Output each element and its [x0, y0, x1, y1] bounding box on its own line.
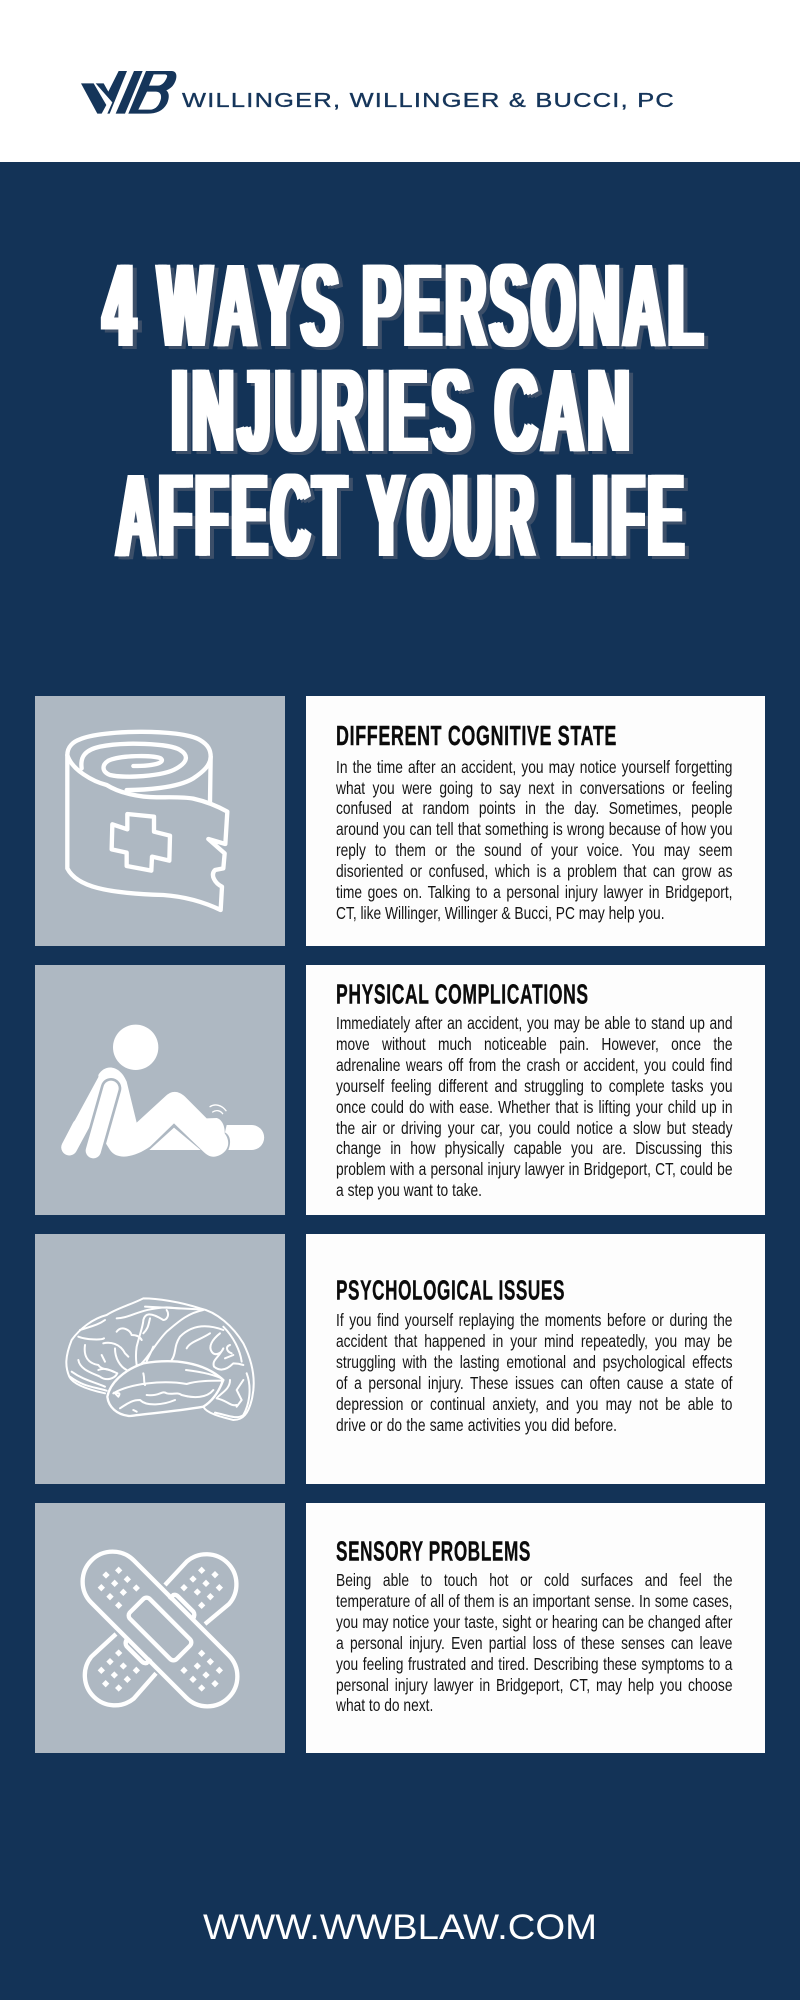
panel: cognitive state text: [306, 696, 765, 946]
logo wordmark: WILLINGER, WILLINGER & BUCCI, PC: [182, 89, 675, 112]
heading: SENSORY PROBLEMS: [336, 1535, 531, 1566]
body text: depression or continual anxiety, and you may not be able to: [336, 1394, 732, 1414]
body text: If you find yourself replaying the moments before or during the: [336, 1310, 732, 1330]
title: [100, 240, 708, 582]
footer website: WWW.WWBLAW.COM: [203, 1908, 597, 1947]
body text: you feeling frustrated and tired. Describing these symptoms to a: [336, 1654, 732, 1674]
body text: personal injury lawyer in Bridgeport, CT, may help you choose: [336, 1675, 732, 1695]
title: INJURIES CAN: [172, 344, 635, 476]
logo: [81, 71, 675, 114]
body text: disoriented or confused, which is a problem that can grow as: [336, 861, 732, 881]
panel: sensory problems text: [306, 1503, 765, 1753]
panel: psychological issues text: [306, 1234, 765, 1484]
body text: a step you want to take.: [336, 1180, 482, 1200]
body text: time goes on. Talking to a personal injury lawyer in Bridgeport,: [336, 882, 732, 902]
heading: PHYSICAL COMPLICATIONS: [336, 978, 589, 1009]
icon: crossed adhesive bandages: [80, 1550, 240, 1708]
icon: bandage roll: [65, 730, 230, 912]
body text: [336, 1570, 732, 1715]
body text: yourself feeling different and struggling to complete tasks you: [336, 1076, 732, 1096]
body text: reply to them or the sound of your voice. You may seem: [336, 840, 732, 860]
body text: once could do with ease. Whether that is lifting your child up in: [336, 1097, 732, 1117]
body text: [336, 1310, 732, 1435]
panel: brain icon: [35, 1234, 285, 1484]
title: 4 WAYS PERSONAL: [104, 240, 707, 372]
body text: what to do next.: [336, 1695, 433, 1715]
body text: problem with a personal injury lawyer in Bridgeport, CT, could be: [336, 1159, 732, 1179]
body text: a personal injury. Even partial loss of these senses can leave: [336, 1633, 732, 1653]
header band: [0, 0, 800, 162]
body text: what you were going to say next in conversations or feeling: [336, 778, 732, 798]
title: AFFECT YOUR LIFE: [117, 450, 688, 582]
body text: around you can tell that something is wrong because of how you: [336, 819, 732, 839]
body text: struggling with the lasting emotional and psychological effects: [336, 1352, 732, 1372]
body text: drive or do the same activities you did before.: [336, 1415, 617, 1435]
heading: DIFFERENT COGNITIVE STATE: [336, 720, 617, 751]
heading: PSYCHOLOGICAL ISSUES: [336, 1274, 565, 1305]
panel: physical complications text: [306, 965, 765, 1215]
body text: In the time after an accident, you may notice yourself forgetting: [336, 757, 732, 777]
body text: change in how physically capable you are. Discussing this: [336, 1138, 732, 1158]
icon: person with leg raised: [61, 1024, 264, 1158]
logo mark: WB monogram: [81, 71, 176, 114]
body text: temperature of all of them is an important sense. In some cases,: [336, 1591, 732, 1611]
body text: [336, 757, 732, 923]
body text: CT, like Willinger, Willinger & Bucci, PC may help you.: [336, 903, 664, 923]
panel: bandages icon: [35, 1503, 285, 1753]
body text: the air or driving your car, you could notice a slow but steady: [336, 1118, 732, 1138]
panel: injured person icon: [35, 965, 285, 1215]
body text: Being able to touch hot or cold surfaces and feel the: [336, 1570, 732, 1590]
body text: Immediately after an accident, you may be able to stand up and: [336, 1013, 732, 1033]
body text: move without much noticeable pain. However, once the: [336, 1034, 732, 1054]
body text: accident that happened in your mind repeatedly, you may be: [336, 1331, 732, 1351]
panel: bandage icon: [35, 696, 285, 946]
body text: of a personal injury. These issues can often cause a state of: [336, 1373, 732, 1393]
body text: adrenaline wears off from the crash or accident, you could find: [336, 1055, 732, 1075]
icon: brain: [65, 1297, 255, 1421]
body text: you may notice your taste, sight or hearing can be changed after: [336, 1612, 732, 1632]
body text: [336, 1013, 732, 1200]
body text: confused at random points in the day. Sometimes, people: [336, 798, 732, 818]
